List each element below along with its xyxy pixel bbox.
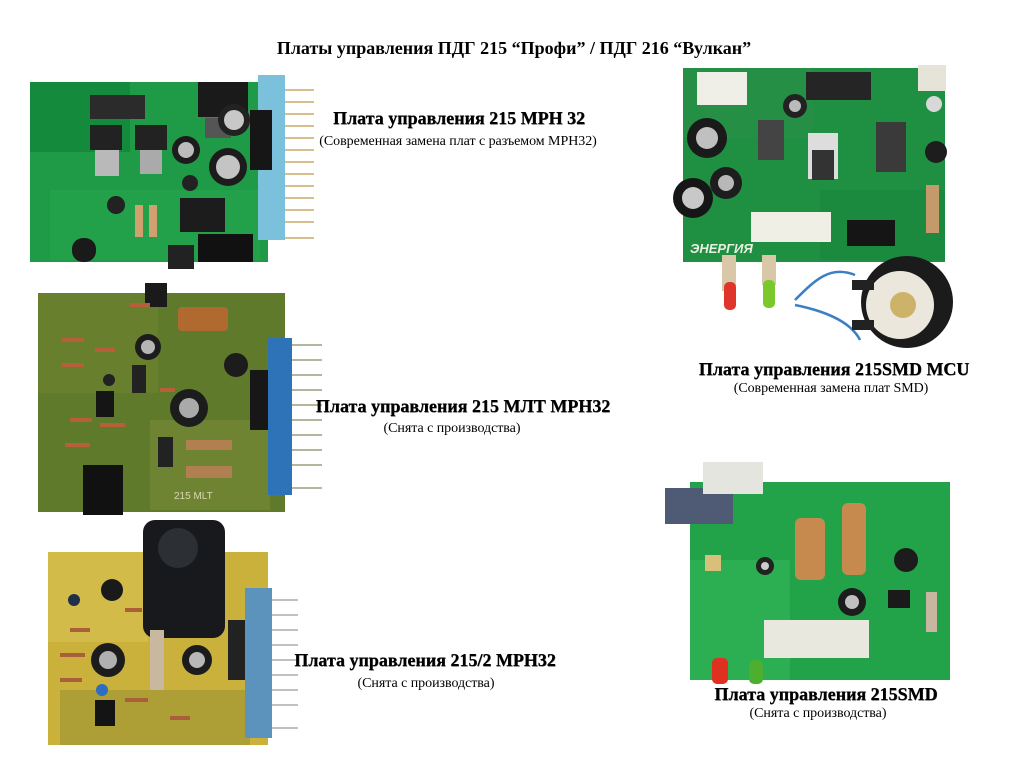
- heading: 215 MPH 32: Плата управления 215 МРН 32: [333, 108, 585, 128]
- board photo: 215 MPH 32: [30, 75, 314, 269]
- heading: 215/2 MPH32: Плата управления 215/2 МРН32: [294, 650, 556, 670]
- note: 215/2 MPH32: (Снята с производства): [358, 676, 494, 691]
- note: 215 MLT MPH32: (Снята с производства): [384, 421, 520, 436]
- note: 215SMD: (Снята с производства): [750, 706, 886, 721]
- heading: 215SMD: Плата управления 215SMD: [714, 684, 938, 704]
- board photo: 215 MLT MPH32: [38, 283, 322, 515]
- board photo: 215SMD MCU: [673, 65, 953, 348]
- board photo: 215 MLT MPH32: 215 MLT: [174, 491, 213, 502]
- heading: 215SMD MCU: Плата управления 215SMD MCU: [699, 359, 969, 379]
- note: 215 MPH 32: (Современная замена плат с разъемом МРН32): [319, 134, 597, 149]
- board photo: 215/2 MPH32: [48, 520, 298, 745]
- board photo: 215SMD: [665, 462, 950, 684]
- board photo: 215SMD MCU: ЭНЕРГИЯ: [690, 241, 753, 256]
- note: 215SMD MCU: (Современная замена плат SMD): [734, 381, 928, 396]
- heading: 215 MLT MPH32: Плата управления 215 МЛТ МРН32: [316, 396, 610, 416]
- title: Платы управления ПДГ 215 “Профи” / ПДГ 216 “Вулкан”: [277, 38, 751, 58]
